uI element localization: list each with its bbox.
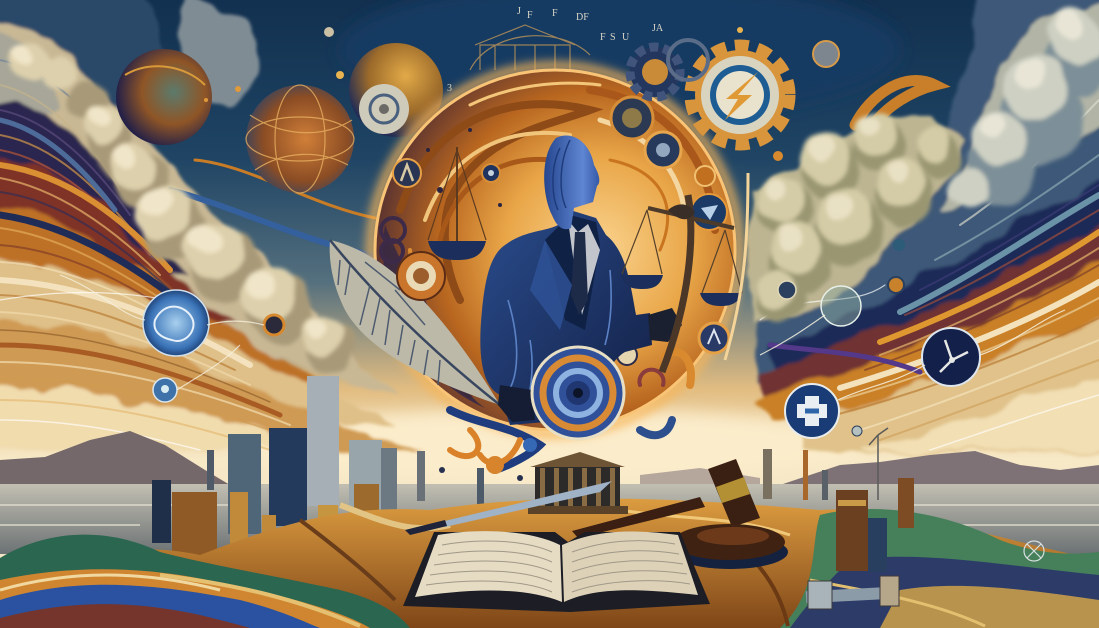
small floating letters: F: [527, 10, 533, 21]
tall pole right of ring: [725, 173, 748, 360]
small floating letters: F: [600, 32, 606, 43]
small ring icons inside the circle: [381, 97, 729, 365]
left cumulus clouds: [10, 42, 356, 374]
planet: wireframe globe: [246, 85, 354, 193]
city skyline: [152, 376, 888, 555]
small floating letters: F: [552, 8, 558, 19]
small floating letters: DF: [576, 12, 589, 23]
blue and orange spiral swirl: [439, 347, 691, 497]
right cumulus clouds: [756, 10, 1099, 322]
translucent orb icons right: [760, 239, 1065, 436]
left swirling clouds and colour bands: [0, 0, 420, 450]
left brush strokes: [0, 60, 300, 450]
right brush strokes: [835, 70, 1099, 450]
planet: golden sphere with spiral: [349, 43, 443, 137]
distant mountains: [0, 431, 1099, 485]
left balance scale: [428, 147, 486, 260]
small hammer object on ground: [806, 576, 899, 609]
seal medallion: [397, 252, 445, 300]
open law book: [403, 531, 710, 612]
medical cross icon: [785, 384, 839, 438]
small orbs: [204, 27, 783, 161]
ring icon left: [264, 315, 284, 335]
small floating letters: J: [517, 6, 521, 17]
central figure in suit: [480, 136, 652, 425]
right swirling clouds and colour bands: [750, 0, 1099, 452]
crystal globe icon left: [143, 290, 209, 356]
small floating letters: [447, 6, 664, 94]
right balance scale and staff: [621, 195, 742, 372]
orange glowing ring panel: [371, 66, 739, 434]
figure's hands: [498, 308, 682, 422]
classical courthouse: [528, 452, 628, 514]
connector lines left: [60, 275, 264, 390]
small floating letters: S: [610, 32, 616, 43]
faint temple sketch at top of ring: [470, 25, 590, 70]
small floating letters: 3: [447, 83, 452, 94]
small floating letters: JA: [652, 23, 664, 34]
gears at top right: [630, 40, 790, 145]
ground waves: [0, 498, 1099, 628]
gavel: [572, 459, 788, 569]
stacked books right: [836, 478, 914, 572]
quill feather: [330, 240, 500, 405]
small floating letters: U: [622, 32, 630, 43]
small bulb icon left: [153, 378, 177, 402]
dark clock icon right: [922, 328, 980, 386]
sea: [0, 484, 1099, 554]
small moon top right: [813, 41, 839, 67]
compass mark on ground: [1024, 541, 1044, 561]
planet: dark sphere upper left: [116, 49, 212, 145]
sword blade: [405, 481, 612, 535]
